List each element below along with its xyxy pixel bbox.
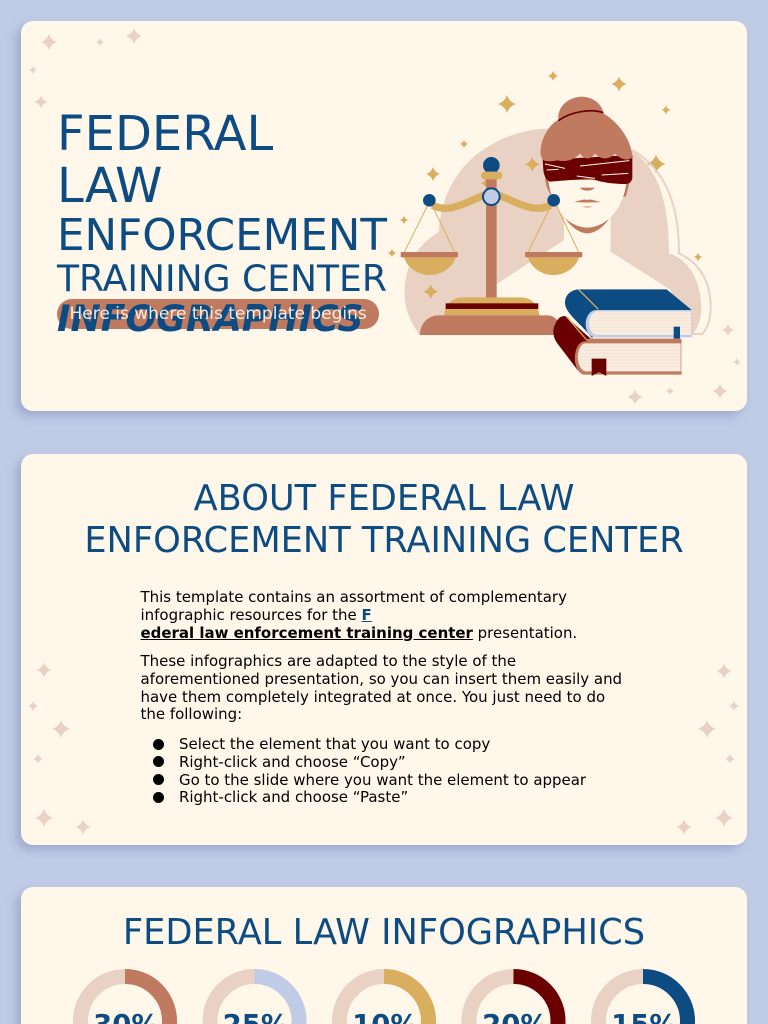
list: instructions: Right-click and choose “Copy” bbox=[179, 753, 406, 771]
donut: 25% bbox=[210, 976, 299, 1024]
text block: intro: infographic resources for the F bbox=[140, 606, 372, 624]
figure: head bbox=[540, 97, 632, 233]
title: law: LAW bbox=[57, 158, 163, 214]
text block: adapted: have them completely integrated at once. You just need to do bbox=[140, 688, 605, 706]
panel: about card bbox=[21, 454, 747, 845]
title: infographics: INFOGRAPHICS bbox=[57, 297, 363, 340]
blue book bbox=[565, 289, 692, 338]
text block: adapted: aforementioned presentation, so you can insert them easily and bbox=[140, 670, 622, 688]
heading: federal law infographics: FEDERAL LAW INFOGRAPHICS bbox=[123, 912, 645, 953]
subtitle pill bbox=[57, 299, 379, 329]
panel: title card bbox=[21, 21, 747, 411]
text block: intro: This template contains an assortment of complementary bbox=[140, 588, 567, 606]
red book bbox=[553, 316, 681, 371]
list: instructions bbox=[153, 735, 586, 806]
text block: intro: ederal law enforcement training center presentation. bbox=[140, 624, 577, 642]
neck and shoulders bbox=[497, 213, 684, 335]
heading: about: ABOUT FEDERAL LAW bbox=[194, 478, 574, 519]
donut: 15% bbox=[598, 976, 688, 1024]
donut: 20% bbox=[469, 976, 558, 1024]
title: enforcement: ENFORCEMENT bbox=[57, 211, 387, 261]
backdrop silhouette bbox=[405, 128, 701, 335]
text block: adapted: These infographics are adapted to the style of the bbox=[140, 652, 516, 670]
list: instructions: Go to the slide where you want the element to appear bbox=[179, 770, 586, 788]
heading: about: ENFORCEMENT TRAINING CENTER bbox=[84, 520, 684, 561]
donut: 30% bbox=[80, 976, 170, 1024]
text block: adapted: the following: bbox=[140, 705, 242, 723]
gold stars on backdrop bbox=[423, 157, 540, 299]
title: training center: TRAINING CENTER bbox=[57, 258, 387, 300]
text block: intro bbox=[140, 588, 577, 642]
panel: infographics card bbox=[21, 887, 747, 1024]
heading: about bbox=[84, 478, 684, 561]
icon: stacked books bbox=[553, 289, 692, 376]
text block: adapted bbox=[140, 652, 622, 723]
list: instructions: Right-click and choose “Paste” bbox=[179, 788, 408, 806]
donut: 10% bbox=[340, 976, 428, 1024]
subtitle text: Here is where this template begins bbox=[70, 304, 367, 324]
list: instructions: Select the element that you want to copy bbox=[179, 735, 490, 753]
title: federal: FEDERAL bbox=[57, 106, 273, 162]
icon: balance scale bbox=[401, 157, 582, 335]
backdrop outline bbox=[632, 150, 711, 334]
